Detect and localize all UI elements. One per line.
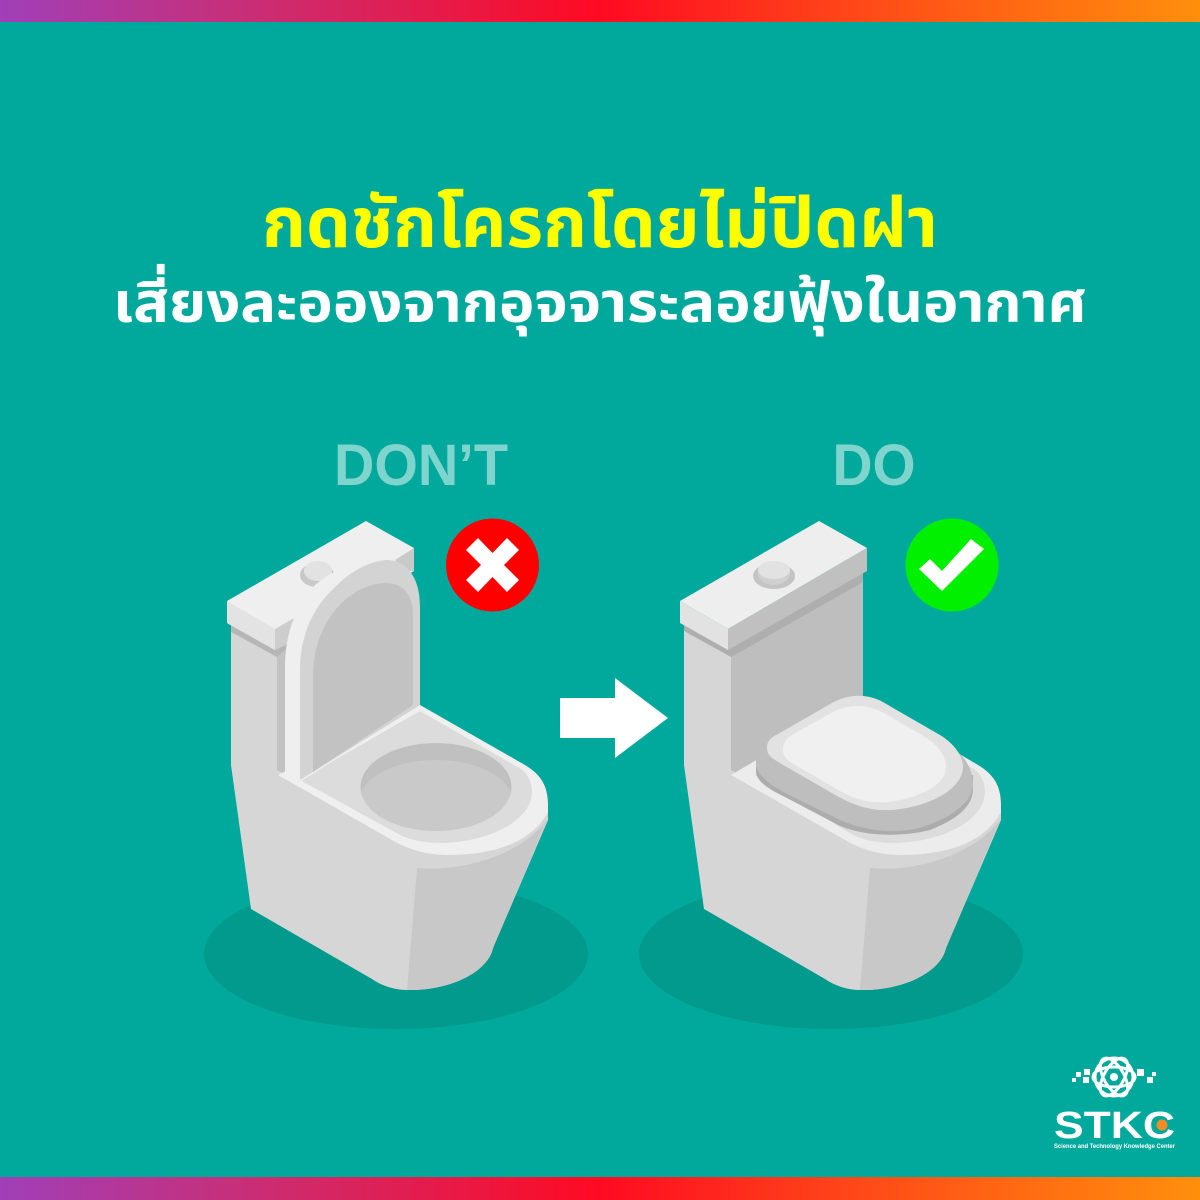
raised lid inner [300,560,420,780]
title: กดชักโครกโดยไม่ปิดฝา [262,184,938,262]
lid highlight [783,706,946,802]
cistern front left face [227,601,275,650]
raised lid recess [313,583,413,772]
logo wordmark: STKC [1054,1105,1175,1147]
subtitle: เสี่ยงละอองจากอุจจาระลอยฟุ้งในอากาศ [113,263,1087,337]
icon: red cross [446,518,539,612]
cistern shadow band [684,570,863,657]
heading: do: DO [832,433,916,498]
seat surface [300,711,532,843]
lid base [756,700,973,831]
bowl rim [731,697,1001,855]
logo orange dot [1156,1120,1168,1130]
bowl right shade [407,820,547,990]
logo pixel dots [1072,1069,1156,1083]
lid shadow [756,762,973,835]
cistern shadow band [231,620,290,657]
cistern left face [680,601,728,650]
floor shadow: right toilet [639,879,1023,1029]
cistern top [680,521,867,629]
toilet with lid open [227,521,548,990]
toilet with lid closed [680,521,1001,990]
flush button [753,561,795,589]
arrow [560,678,668,758]
raised lid outer edge [285,560,420,782]
tank and bowl body [684,625,1001,990]
cistern front right face [275,617,296,650]
bowl water [362,760,510,831]
cistern top [227,521,414,650]
bowl rim [278,705,548,855]
heading: don't: DON’T [334,433,508,498]
seat surface [755,712,985,843]
logo [1054,1054,1176,1150]
bowl right shade [860,820,1000,990]
lid top [767,696,963,810]
logo atom emblem [1093,1054,1135,1100]
tank and bowl body [231,625,548,990]
tank back recess [277,645,287,776]
flush button [300,561,334,587]
floor shadow: left toilet [204,879,588,1029]
icon: green check [906,518,998,612]
cistern right face [728,548,867,650]
bowl opening [360,743,512,831]
tank back face [731,578,863,776]
logo tagline: Science and Technology Knowledge Center [1054,1144,1176,1150]
bottom gradient bar [0,1177,1200,1200]
top gradient bar [0,0,1200,22]
cistern right end [395,548,414,571]
